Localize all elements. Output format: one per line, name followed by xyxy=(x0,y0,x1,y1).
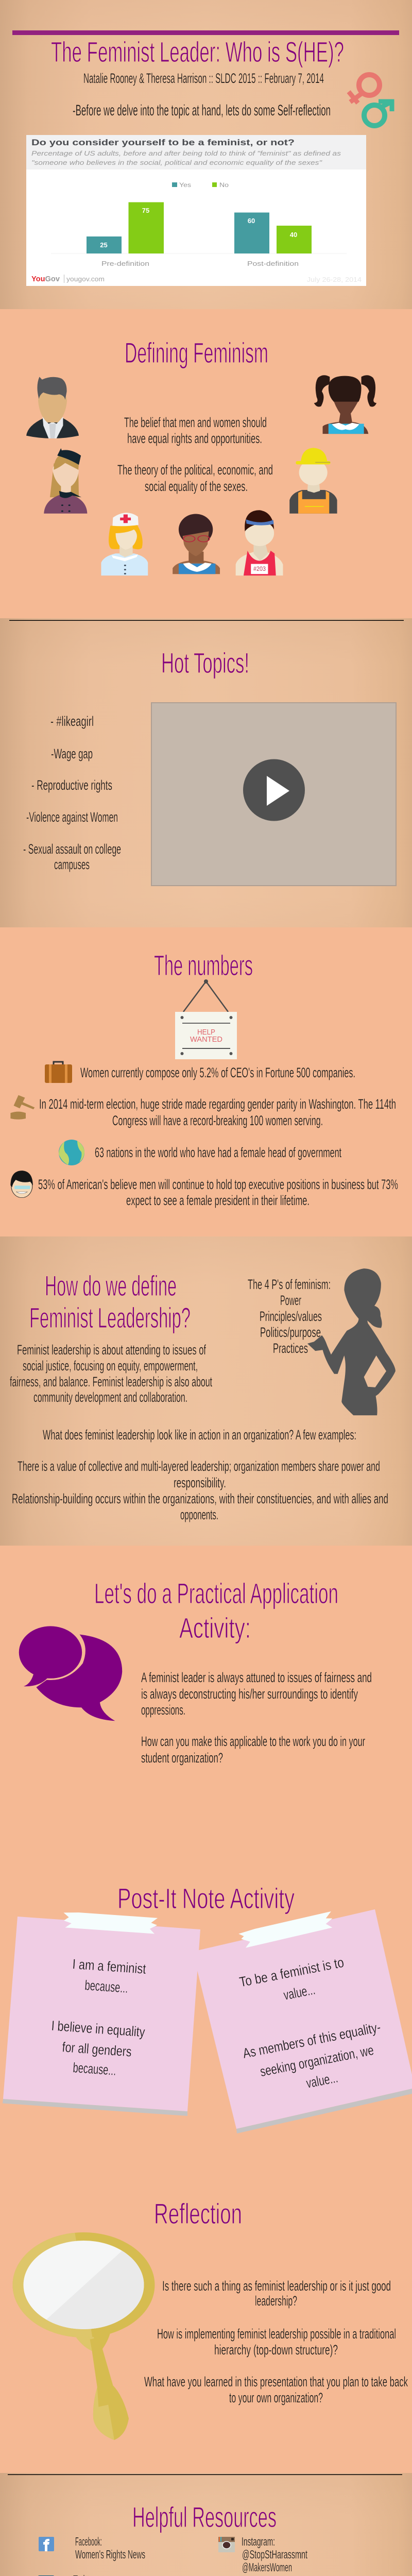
icon: help wanted sign: WANTED xyxy=(190,1035,222,1044)
note text: left: I believe in equality xyxy=(51,2018,146,2040)
icon: briefcase xyxy=(45,1062,72,1083)
heading: practical application xyxy=(94,1577,338,1644)
examples text: opponents. xyxy=(180,1507,218,1522)
topics list: -Violence against Women xyxy=(26,809,118,825)
icon: female symbol xyxy=(349,75,380,103)
definition text: social equality of the sexes. xyxy=(145,479,248,494)
heading: reflection: Reflection xyxy=(154,2197,242,2230)
stat: beliefs xyxy=(38,1177,398,1208)
examples text: responsibility. xyxy=(174,1475,226,1490)
icon: girl with pigtails xyxy=(314,375,376,434)
resource: facebook: Facebook: xyxy=(75,2535,102,2548)
definition paragraph xyxy=(10,1342,212,1405)
note text: left: for all genders xyxy=(62,2039,132,2060)
topics list: campuses xyxy=(54,857,90,872)
definition paragraph: Feminist leadership is about attending to issues of xyxy=(17,1342,206,1358)
icon: hand mirror xyxy=(12,2232,154,2440)
topics list: - Reproductive rights xyxy=(31,777,112,793)
bars: pre-definition: 25 xyxy=(100,241,108,249)
icon: woman silhouette xyxy=(307,1268,396,1415)
definition paragraph: fairness, and balance. Feminist leadership is also about xyxy=(10,1374,212,1389)
heading: feminist leadership: Feminist Leadership? xyxy=(29,1301,191,1334)
bars: post-definition: 60 xyxy=(248,217,255,225)
panel: feminist leadership xyxy=(0,1236,412,1546)
topics list: -Wage gap xyxy=(51,746,93,761)
activity text: oppressions. xyxy=(141,1702,185,1718)
icon: runner xyxy=(236,510,283,575)
reflection questions: hierarchy (top-down structure)? xyxy=(214,2342,338,2358)
icon: woman with glasses xyxy=(173,514,220,574)
icon: help wanted sign: HELP xyxy=(197,1028,215,1037)
heading: post-it: Post-It Note Activity xyxy=(117,1882,295,1914)
icon: tumblr xyxy=(38,2575,54,2576)
topics list: - Sexual assault on college xyxy=(23,841,121,857)
icon: gavel xyxy=(10,1095,35,1120)
panel: the numbers xyxy=(0,927,412,1236)
panel: helpful resources xyxy=(0,2473,412,2576)
list: 4 Ps of feminism: Principles/values xyxy=(260,1309,322,1324)
heading: the numbers: The numbers xyxy=(154,949,253,981)
icon: nurse xyxy=(101,513,148,575)
definition text: The theory of the political, economic, and xyxy=(117,462,273,478)
definition text: have equal rights and opportunities. xyxy=(127,431,262,446)
heading: feminist leadership xyxy=(29,1269,191,1334)
icon: play button xyxy=(243,759,305,821)
chart subheading: Percentage of US adults, before and after being told to think of "feminist" as defined as xyxy=(31,149,341,157)
panel: practical application, post-it, reflection xyxy=(0,1546,412,2473)
heading: practical application: Activity: xyxy=(179,1612,251,1644)
title bar xyxy=(12,30,399,35)
topics list xyxy=(23,714,121,872)
icon: businessman xyxy=(26,377,79,438)
legend: Yes xyxy=(179,181,191,189)
icon: globe xyxy=(59,1140,84,1165)
post-it note: left xyxy=(3,1912,200,2116)
resource: instagram: Instagram: xyxy=(242,2535,275,2548)
axis labels: Pre-definition xyxy=(101,260,149,267)
reflection questions: leadership? xyxy=(255,2293,297,2309)
examples text xyxy=(12,1427,388,1522)
note text: left: I am a feminist xyxy=(72,1956,147,1977)
chart footer: source: yougov.com xyxy=(66,275,105,283)
topics list: - #likeagirl xyxy=(50,714,94,729)
chart footer: source xyxy=(31,275,362,283)
heading: defining feminism: Defining Feminism xyxy=(125,336,268,369)
definition paragraph: social justice, focusing on equity, empowerment, xyxy=(23,1358,198,1374)
video placeholder xyxy=(151,703,396,886)
resource: instagram: @StopStHarassmnt xyxy=(242,2548,307,2561)
stat: congress xyxy=(39,1096,396,1128)
panel: header xyxy=(0,0,412,309)
chart footer: source: July 26-28, 2014 xyxy=(307,276,362,283)
chart footer: source: YouGov xyxy=(31,275,60,283)
heading: feminist leadership: How do we define xyxy=(45,1269,177,1302)
resource: instagram xyxy=(242,2535,307,2574)
icon: woman with hat xyxy=(44,448,87,514)
list: 4 Ps of feminism: The 4 P's of feminism: xyxy=(248,1277,331,1292)
note text: left xyxy=(51,1956,147,2078)
panel: defining feminism xyxy=(0,309,412,618)
bars: post-definition xyxy=(234,212,312,253)
list: 4 Ps of feminism xyxy=(248,1277,331,1356)
list: 4 Ps of feminism: Practices xyxy=(273,1341,308,1356)
icon: instagram xyxy=(218,2537,235,2552)
list: 4 Ps of feminism: Power xyxy=(280,1293,301,1308)
tape: left xyxy=(63,1912,158,1934)
note text: right: seeking organization, we xyxy=(259,2042,375,2079)
axis labels xyxy=(101,260,299,267)
legend xyxy=(172,181,229,189)
note text: right: value... xyxy=(282,1982,317,2003)
heading: helpful resources: Helpful Resources xyxy=(132,2501,277,2533)
legend: No xyxy=(219,181,229,189)
activity text: student organization? xyxy=(141,1750,223,1766)
note text: right: To be a feminist is to xyxy=(238,1955,345,1990)
heading: hot topics: Hot Topics! xyxy=(161,647,249,679)
icon: speech bubbles xyxy=(19,1626,122,1721)
icon: help wanted sign xyxy=(175,979,237,1059)
panel: hot topics xyxy=(0,618,412,927)
activity text xyxy=(141,1670,372,1766)
chart subheading: "someone who believes in the social, political and economic equality of the sexes" xyxy=(31,159,323,166)
post-it note: right xyxy=(193,1909,412,2133)
icon: construction worker xyxy=(289,448,337,514)
note text: right: As members of this equality- xyxy=(242,2019,382,2061)
definition paragraph: community development and collaboration. xyxy=(33,1389,187,1405)
note text: left: because... xyxy=(84,1977,129,1996)
bars: pre-definition xyxy=(87,202,164,253)
icon: runner: #203 xyxy=(253,565,266,572)
icon: male symbol xyxy=(364,101,392,126)
resource: instagram: @MakersWomen xyxy=(242,2561,292,2574)
resource: facebook: Women's Rights News xyxy=(75,2548,145,2561)
chart subheading xyxy=(31,149,341,166)
reflection questions xyxy=(144,2278,408,2405)
note text: right: value... xyxy=(305,2070,339,2091)
tape: right xyxy=(238,1911,332,1948)
definition text xyxy=(117,415,273,494)
bars: post-definition: 40 xyxy=(290,231,297,239)
bar chart: feminist survey xyxy=(26,135,366,286)
icon: facebook xyxy=(39,2537,54,2551)
reflection questions: to your own organization? xyxy=(229,2390,323,2405)
bars: pre-definition: 75 xyxy=(142,207,149,214)
note text: right xyxy=(238,1955,382,2091)
chart heading: Do you consider yourself to be a feminist, or not? xyxy=(31,138,295,147)
list: 4 Ps of feminism: Politics/purpose xyxy=(260,1325,321,1340)
axis labels: Post-definition xyxy=(247,260,299,267)
definition text: The belief that men and women should xyxy=(124,415,267,430)
icon: smiling face xyxy=(10,1171,33,1198)
note text: left: because... xyxy=(73,2060,117,2078)
resource: facebook xyxy=(75,2535,145,2561)
